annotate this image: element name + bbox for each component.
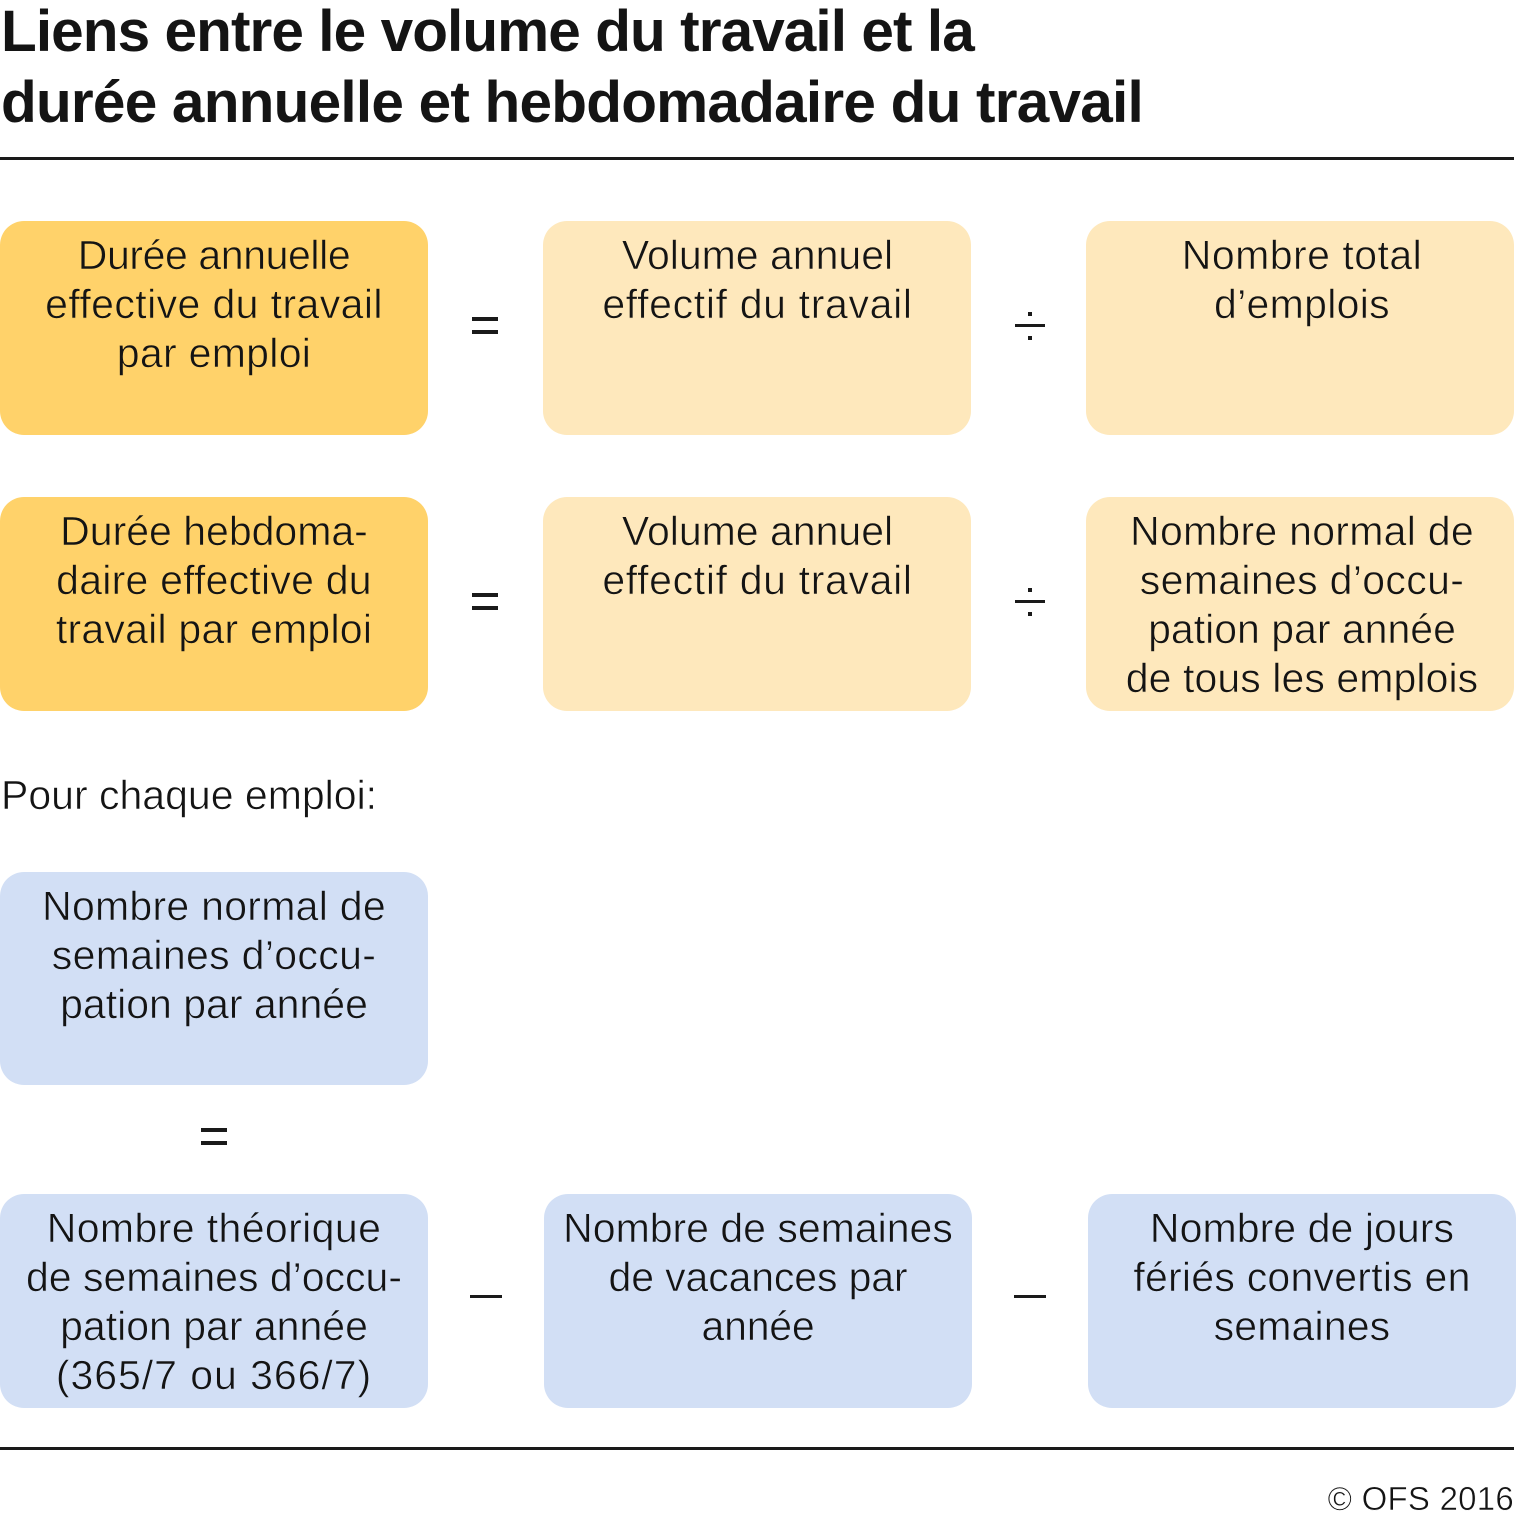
box: semaines de vacances: Nombre de semaines <box>563 1205 953 1251</box>
box: nombre normal de semaines par année <box>0 872 428 1085</box>
box: nombre total d'emplois: Nombre total <box>1182 232 1422 278</box>
title: durée annuelle et hebdomadaire du travail <box>1 70 1143 135</box>
box: durée annuelle effective <box>0 221 428 435</box>
box: nombre théorique: pation par année <box>60 1303 368 1349</box>
title: Liens entre le volume du travail et la <box>1 0 974 64</box>
box: semaines de vacances: de vacances par <box>609 1254 907 1300</box>
box: durée annuelle effective: Durée annuelle <box>78 232 350 278</box>
box: durée hebdomadaire effective: daire effective du <box>56 557 372 603</box>
box: nombre théorique: (365/7 ou 366/7) <box>56 1352 372 1398</box>
box: nombre théorique: de semaines d’occu- <box>26 1254 402 1300</box>
box: semaines de vacances <box>544 1194 972 1408</box>
box: volume annuel row 2: effectif du travail <box>602 557 913 603</box>
operator: equals row 2 <box>472 593 498 610</box>
box: nombre normal de semaines tous emplois: pation par année <box>1148 606 1456 652</box>
box: durée hebdomadaire effective: travail par emploi <box>56 606 372 652</box>
box: nombre normal de semaines tous emplois <box>1086 497 1514 711</box>
box: jours fériés: Nombre de jours <box>1150 1205 1454 1251</box>
box: nombre normal de semaines tous emplois: de tous les emplois <box>1126 655 1478 701</box>
operator: equals row 1 <box>472 317 498 334</box>
box: durée hebdomadaire effective: Durée hebdoma- <box>60 508 368 554</box>
box: nombre total d'emplois: d’emplois <box>1214 281 1390 327</box>
box: jours fériés <box>1088 1194 1516 1408</box>
text: pour chaque emploi: Pour chaque emploi: <box>1 772 377 818</box>
box: durée annuelle effective: effective du travail <box>45 281 383 327</box>
source credit: © OFS 2016 <box>1328 1480 1514 1517</box>
box: volume annuel row 1 <box>543 221 971 435</box>
box: nombre théorique: Nombre théorique <box>47 1205 381 1251</box>
box: durée annuelle effective: par emploi <box>117 330 311 376</box>
box: volume annuel row 1: Volume annuel <box>622 232 893 278</box>
operator: minus 2 <box>1014 1295 1046 1298</box>
box: durée hebdomadaire effective <box>0 497 428 711</box>
box: nombre normal de semaines tous emplois: Nombre normal de <box>1130 508 1474 554</box>
box: nombre normal de semaines par année: Nombre normal de <box>42 883 386 929</box>
box: nombre total d'emplois <box>1086 221 1514 435</box>
box: semaines de vacances: année <box>701 1303 814 1349</box>
box: nombre théorique <box>0 1194 428 1408</box>
box: volume annuel row 2: Volume annuel <box>622 508 893 554</box>
box: volume annuel row 1: effectif du travail <box>602 281 913 327</box>
box: jours fériés: semaines <box>1214 1303 1390 1349</box>
box: jours fériés: fériés convertis en <box>1133 1254 1471 1300</box>
operator: equals vertical <box>201 1128 227 1145</box>
operator: minus 1 <box>470 1295 502 1298</box>
box: nombre normal de semaines par année: semaines d’occu- <box>52 932 376 978</box>
operator: divide row 2 <box>1015 588 1045 616</box>
box: volume annuel row 2 <box>543 497 971 711</box>
box: nombre normal de semaines par année: pation par année <box>60 981 368 1027</box>
operator: divide row 1 <box>1015 312 1045 340</box>
box: nombre normal de semaines tous emplois: semaines d’occu- <box>1140 557 1464 603</box>
title <box>1 0 1143 135</box>
